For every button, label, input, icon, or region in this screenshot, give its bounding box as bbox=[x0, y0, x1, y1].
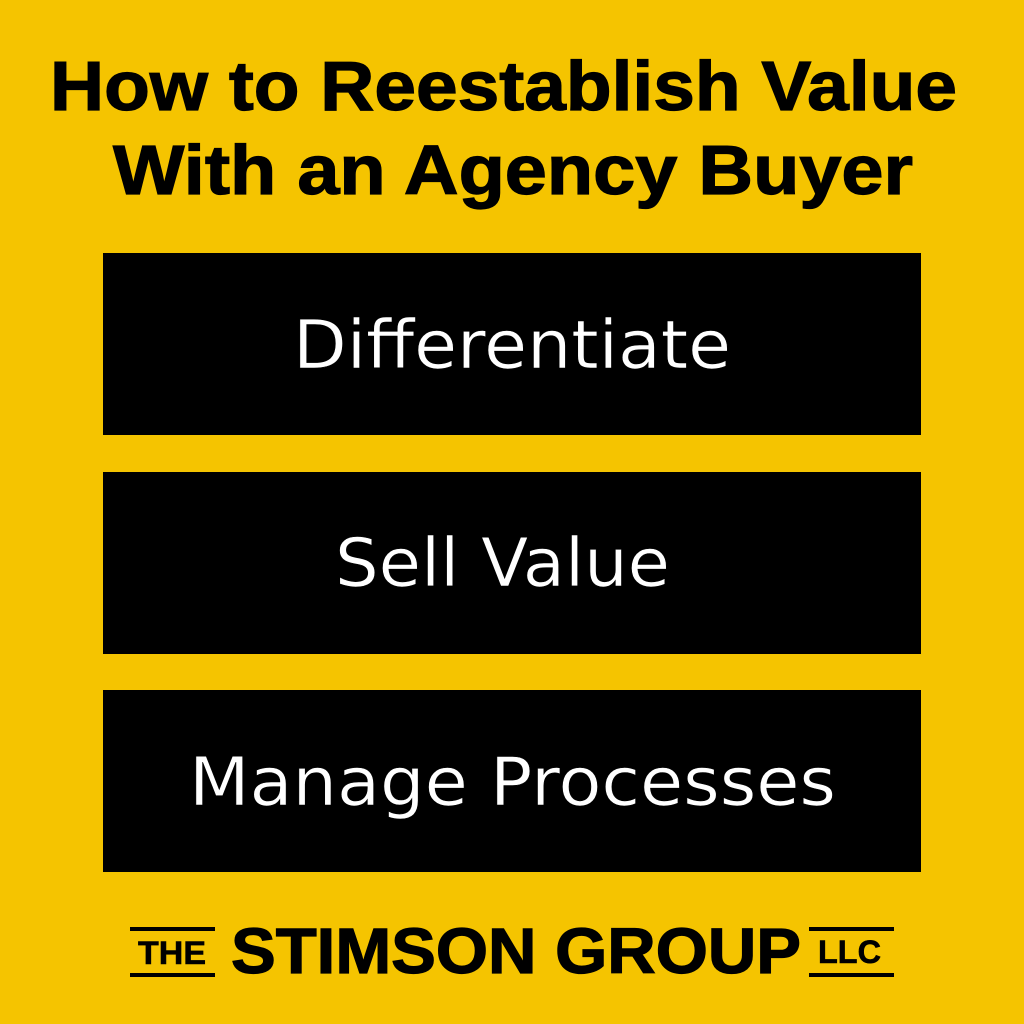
panel: Differentiate bbox=[103, 253, 921, 435]
panel: Sell Value bbox=[103, 472, 921, 654]
title: With an Agency Buyer bbox=[113, 131, 913, 209]
panel: Differentiate: Differentiate bbox=[293, 306, 731, 384]
title: How to Reestablish Value bbox=[50, 47, 957, 125]
panel: Manage Processes bbox=[103, 690, 921, 872]
title bbox=[50, 47, 957, 209]
logo: The Stimson Group LLC: LLC bbox=[818, 934, 881, 970]
panel: Sell Value: Sell Value bbox=[335, 524, 670, 602]
logo: The Stimson Group LLC: STIMSON GROUP bbox=[231, 915, 801, 987]
panel: Manage Processes: Manage Processes bbox=[189, 743, 836, 821]
logo: The Stimson Group LLC: THE bbox=[138, 935, 206, 971]
